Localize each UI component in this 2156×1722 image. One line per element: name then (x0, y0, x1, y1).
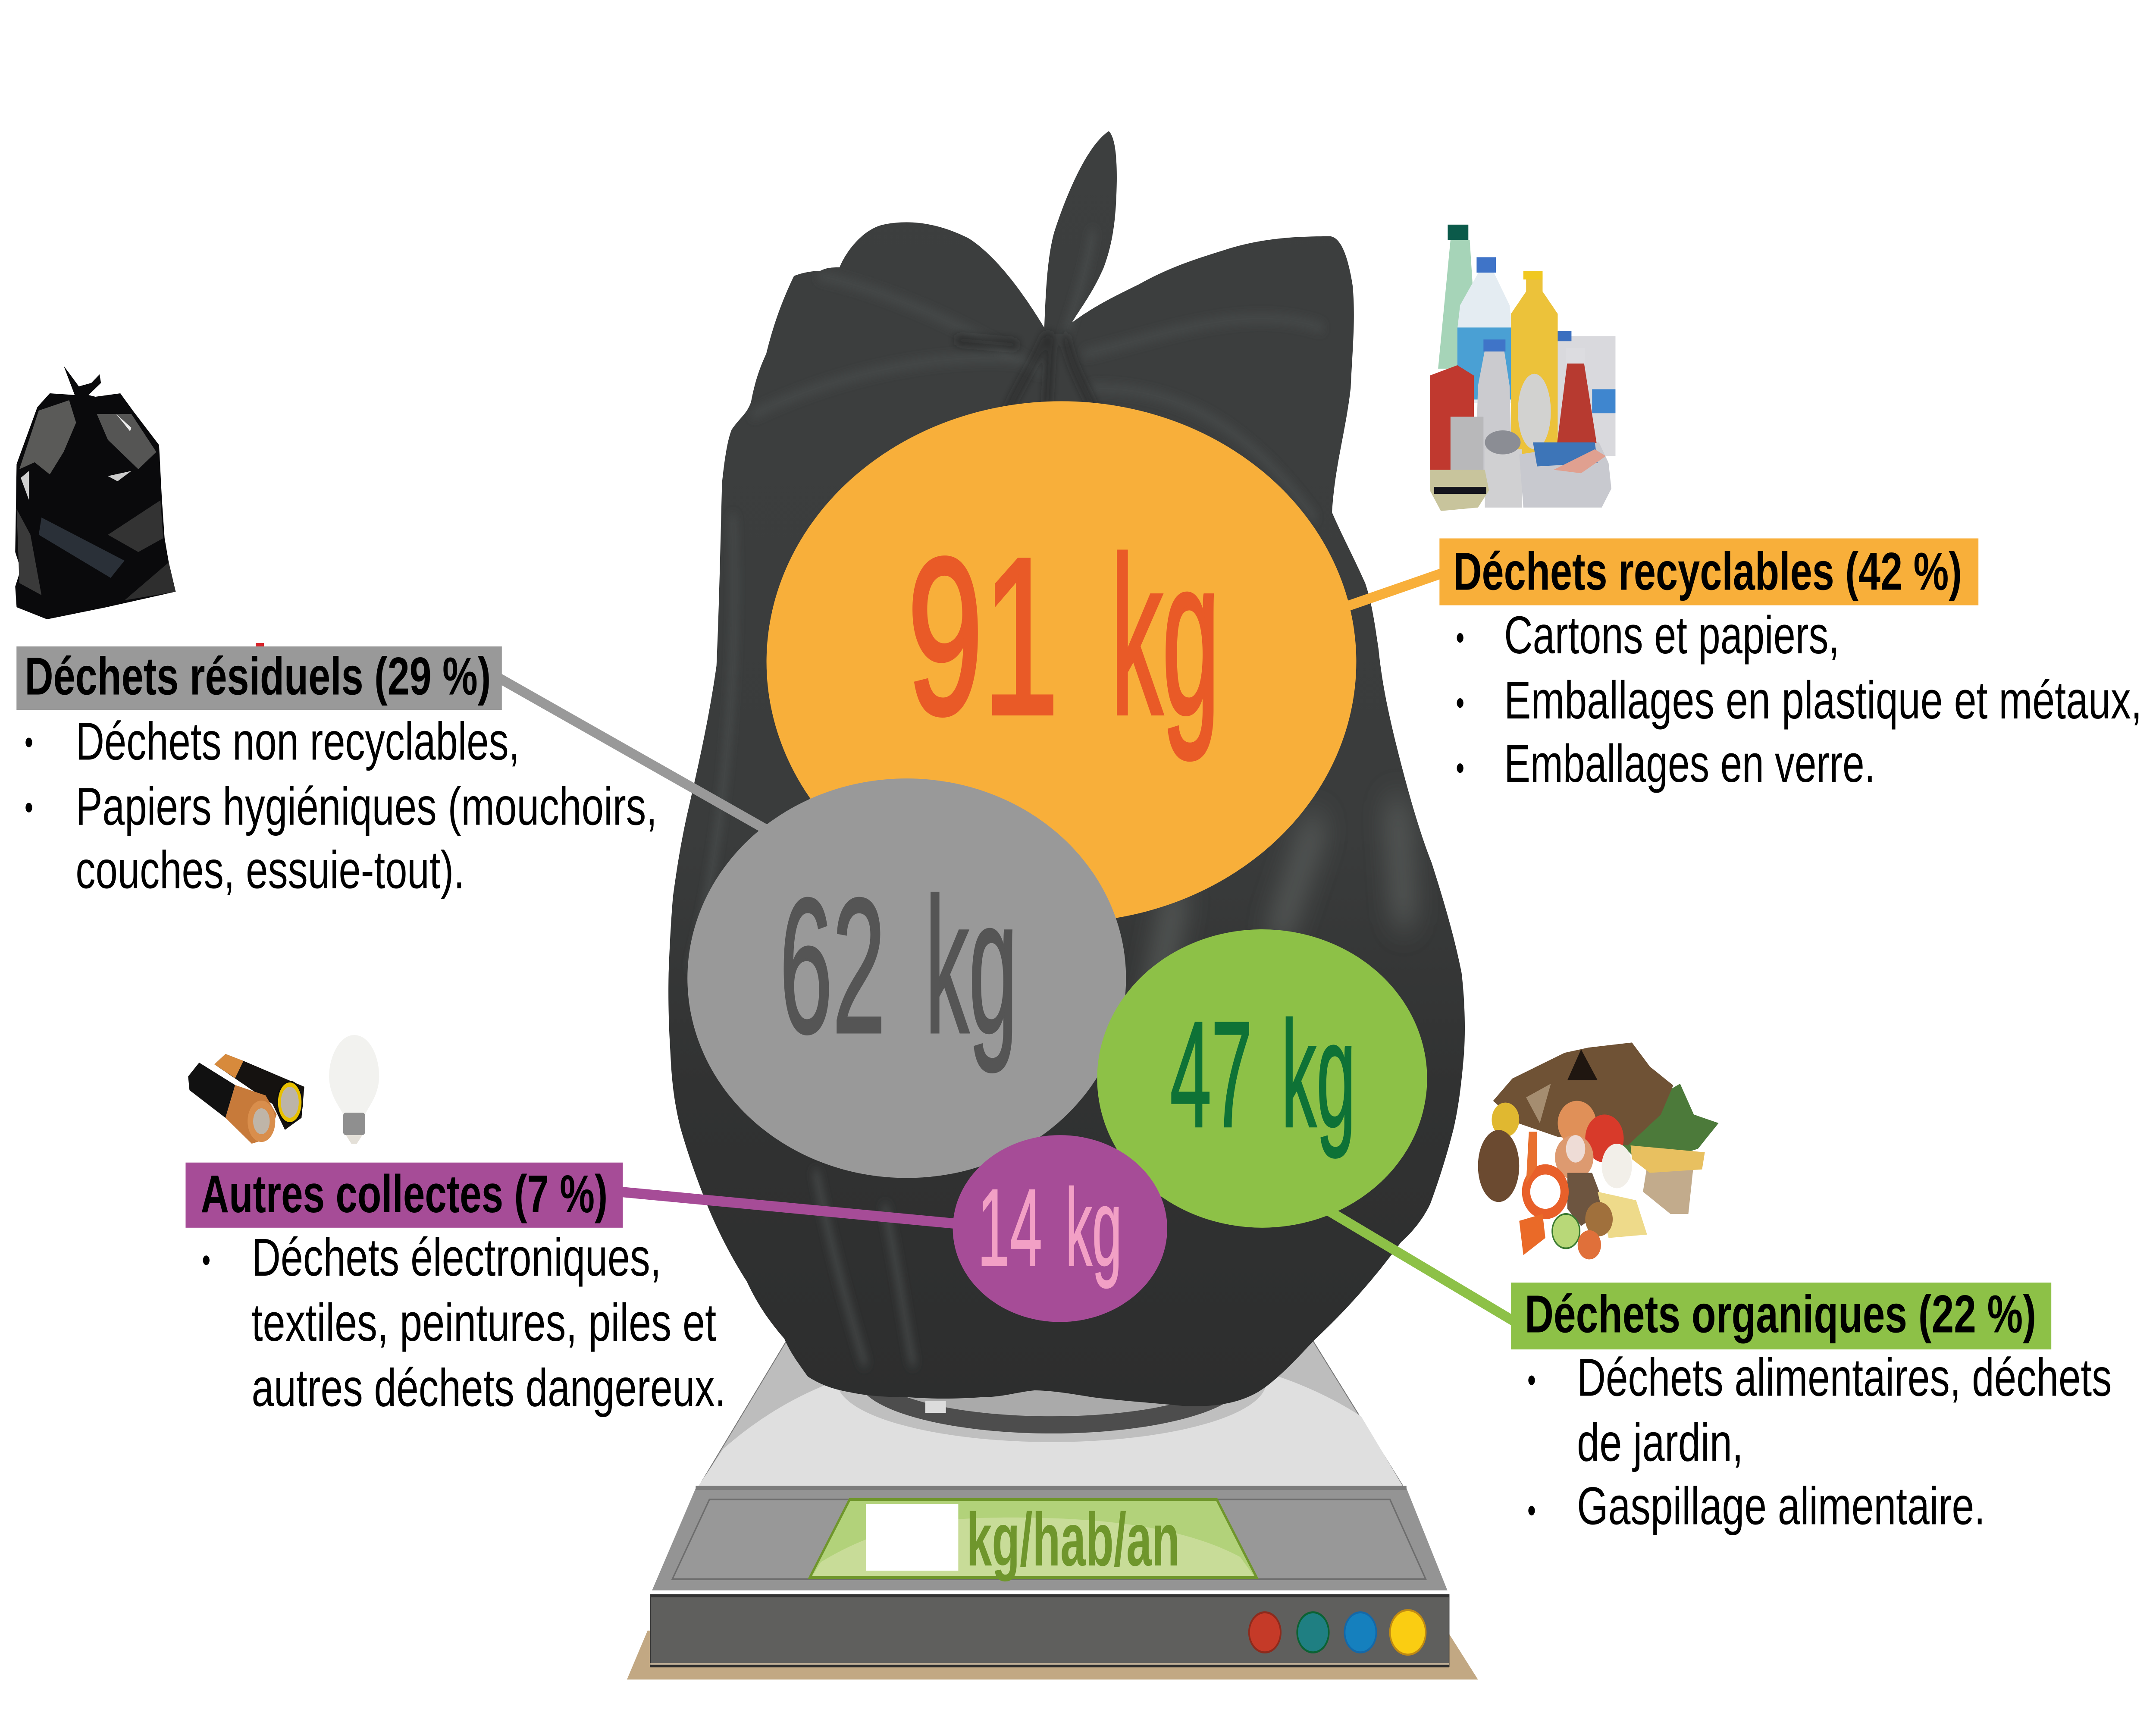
tomato (1585, 1114, 1624, 1163)
list: recyclable waste (1457, 605, 2142, 794)
heading: organic waste: Déchets organiques (22 %) (1525, 1284, 2036, 1344)
icon: recyclable packaging photo (1430, 225, 1615, 511)
red speck above residuals label (256, 643, 264, 646)
ketchup (1556, 362, 1598, 449)
green bottle (1438, 240, 1478, 369)
heading: residual waste: Déchets résiduels (29 %) (25, 646, 491, 706)
bubble: 14 kg other collections (953, 1135, 1167, 1322)
scale base block (650, 1595, 1449, 1667)
scale front panel (652, 1486, 1449, 1593)
list: recyclable waste: Emballages en verre. (1504, 734, 1875, 794)
cans (1451, 417, 1483, 471)
red box (1430, 365, 1474, 489)
scale (627, 1322, 1478, 1679)
carton (1547, 336, 1615, 456)
cardboard (1643, 1163, 1694, 1214)
display unit: kg/hab/an (966, 1497, 1180, 1582)
pale pasta (1598, 1192, 1647, 1238)
list: residual waste: Papiers hygiéniques (mouchoirs, (75, 777, 657, 836)
bubble: 14 kg other collections: kg (1065, 1166, 1122, 1289)
bubble: 62 kg residuals: kg (925, 859, 1017, 1074)
round peel (1478, 1130, 1519, 1202)
potato peel (1631, 1145, 1705, 1173)
heading: other collections: Autres collectes (7 %) (201, 1164, 608, 1224)
back battery (214, 1054, 304, 1130)
list: organic waste: de jardin, (1577, 1413, 1743, 1472)
white peel (1602, 1144, 1632, 1188)
list: organic waste: Déchets alimentaires, déchets (1577, 1348, 2112, 1407)
scale platform top (696, 1322, 1407, 1492)
water bottle (1457, 271, 1512, 403)
leader line: other collections (619, 1192, 962, 1224)
leader line: organic (1328, 1211, 1515, 1322)
bubble: 91 kg recyclables: 91 (907, 512, 1059, 761)
walnut (1585, 1202, 1613, 1236)
list: other collections: textiles, peintures, piles et (251, 1293, 716, 1352)
brown bits (1567, 1173, 1606, 1226)
icon: batteries photo (188, 1054, 304, 1144)
bubble: 91 kg recyclables (767, 401, 1356, 922)
bubble: 62 kg residuals: 62 (780, 859, 885, 1073)
yellow bottle (1511, 274, 1558, 455)
bubble: 47 kg organic (1097, 929, 1427, 1228)
main garbage bag (668, 131, 1465, 1406)
egg box (1430, 470, 1489, 511)
bubble: 47 kg organic: kg (1282, 991, 1356, 1160)
leader line: recyclables (1348, 573, 1444, 606)
scale display (810, 1497, 1257, 1582)
blanked total (866, 1504, 958, 1571)
magazines (1519, 442, 1611, 508)
light fold zones (1148, 811, 1404, 1035)
leader line: residuals (498, 678, 770, 831)
icon: black trash bag photo (15, 366, 175, 619)
carrot slice (1578, 1230, 1601, 1259)
bubble: 62 kg residuals (687, 778, 1126, 1178)
list: residual waste: Déchets non recyclables, (75, 712, 520, 771)
icon: organic waste photo (1478, 1042, 1719, 1259)
bubble: 47 kg organic: 47 (1170, 991, 1253, 1159)
grass (1622, 1084, 1719, 1166)
list: organic waste (1528, 1348, 2112, 1536)
front battery (188, 1063, 235, 1118)
panel: recyclable waste (1439, 538, 2142, 794)
scale buttons (1249, 1610, 1426, 1655)
panel: other collections (185, 1163, 726, 1418)
bubble: 14 kg other collections: 14 (978, 1166, 1042, 1289)
list: other collections: Déchets électroniques, (251, 1228, 661, 1287)
list: residual waste (25, 712, 657, 900)
list: organic waste: Gaspillage alimentaire. (1577, 1476, 1985, 1536)
scale ground shadow (627, 1618, 1478, 1679)
bubble: 91 kg recyclables: kg (1111, 512, 1219, 762)
panel: residual waste (16, 646, 657, 900)
cucumber (1552, 1214, 1580, 1248)
banana peel (1492, 1103, 1519, 1137)
panel: organic waste (1511, 1283, 2112, 1536)
carrots (1526, 1170, 1564, 1214)
white bottle (1475, 350, 1512, 480)
heading: recyclable waste: Déchets recyclables (42 %) (1453, 542, 1962, 601)
list: other collections (203, 1228, 726, 1418)
list: residual waste: couches, essuie-tout). (75, 840, 465, 900)
list: recyclable waste: Cartons et papiers, (1504, 605, 1839, 665)
egg shell (1558, 1101, 1596, 1145)
list: other collections: autres déchets dangereux. (251, 1358, 726, 1418)
dead leaves (1493, 1042, 1673, 1145)
icon: light bulb photo (329, 1035, 379, 1144)
